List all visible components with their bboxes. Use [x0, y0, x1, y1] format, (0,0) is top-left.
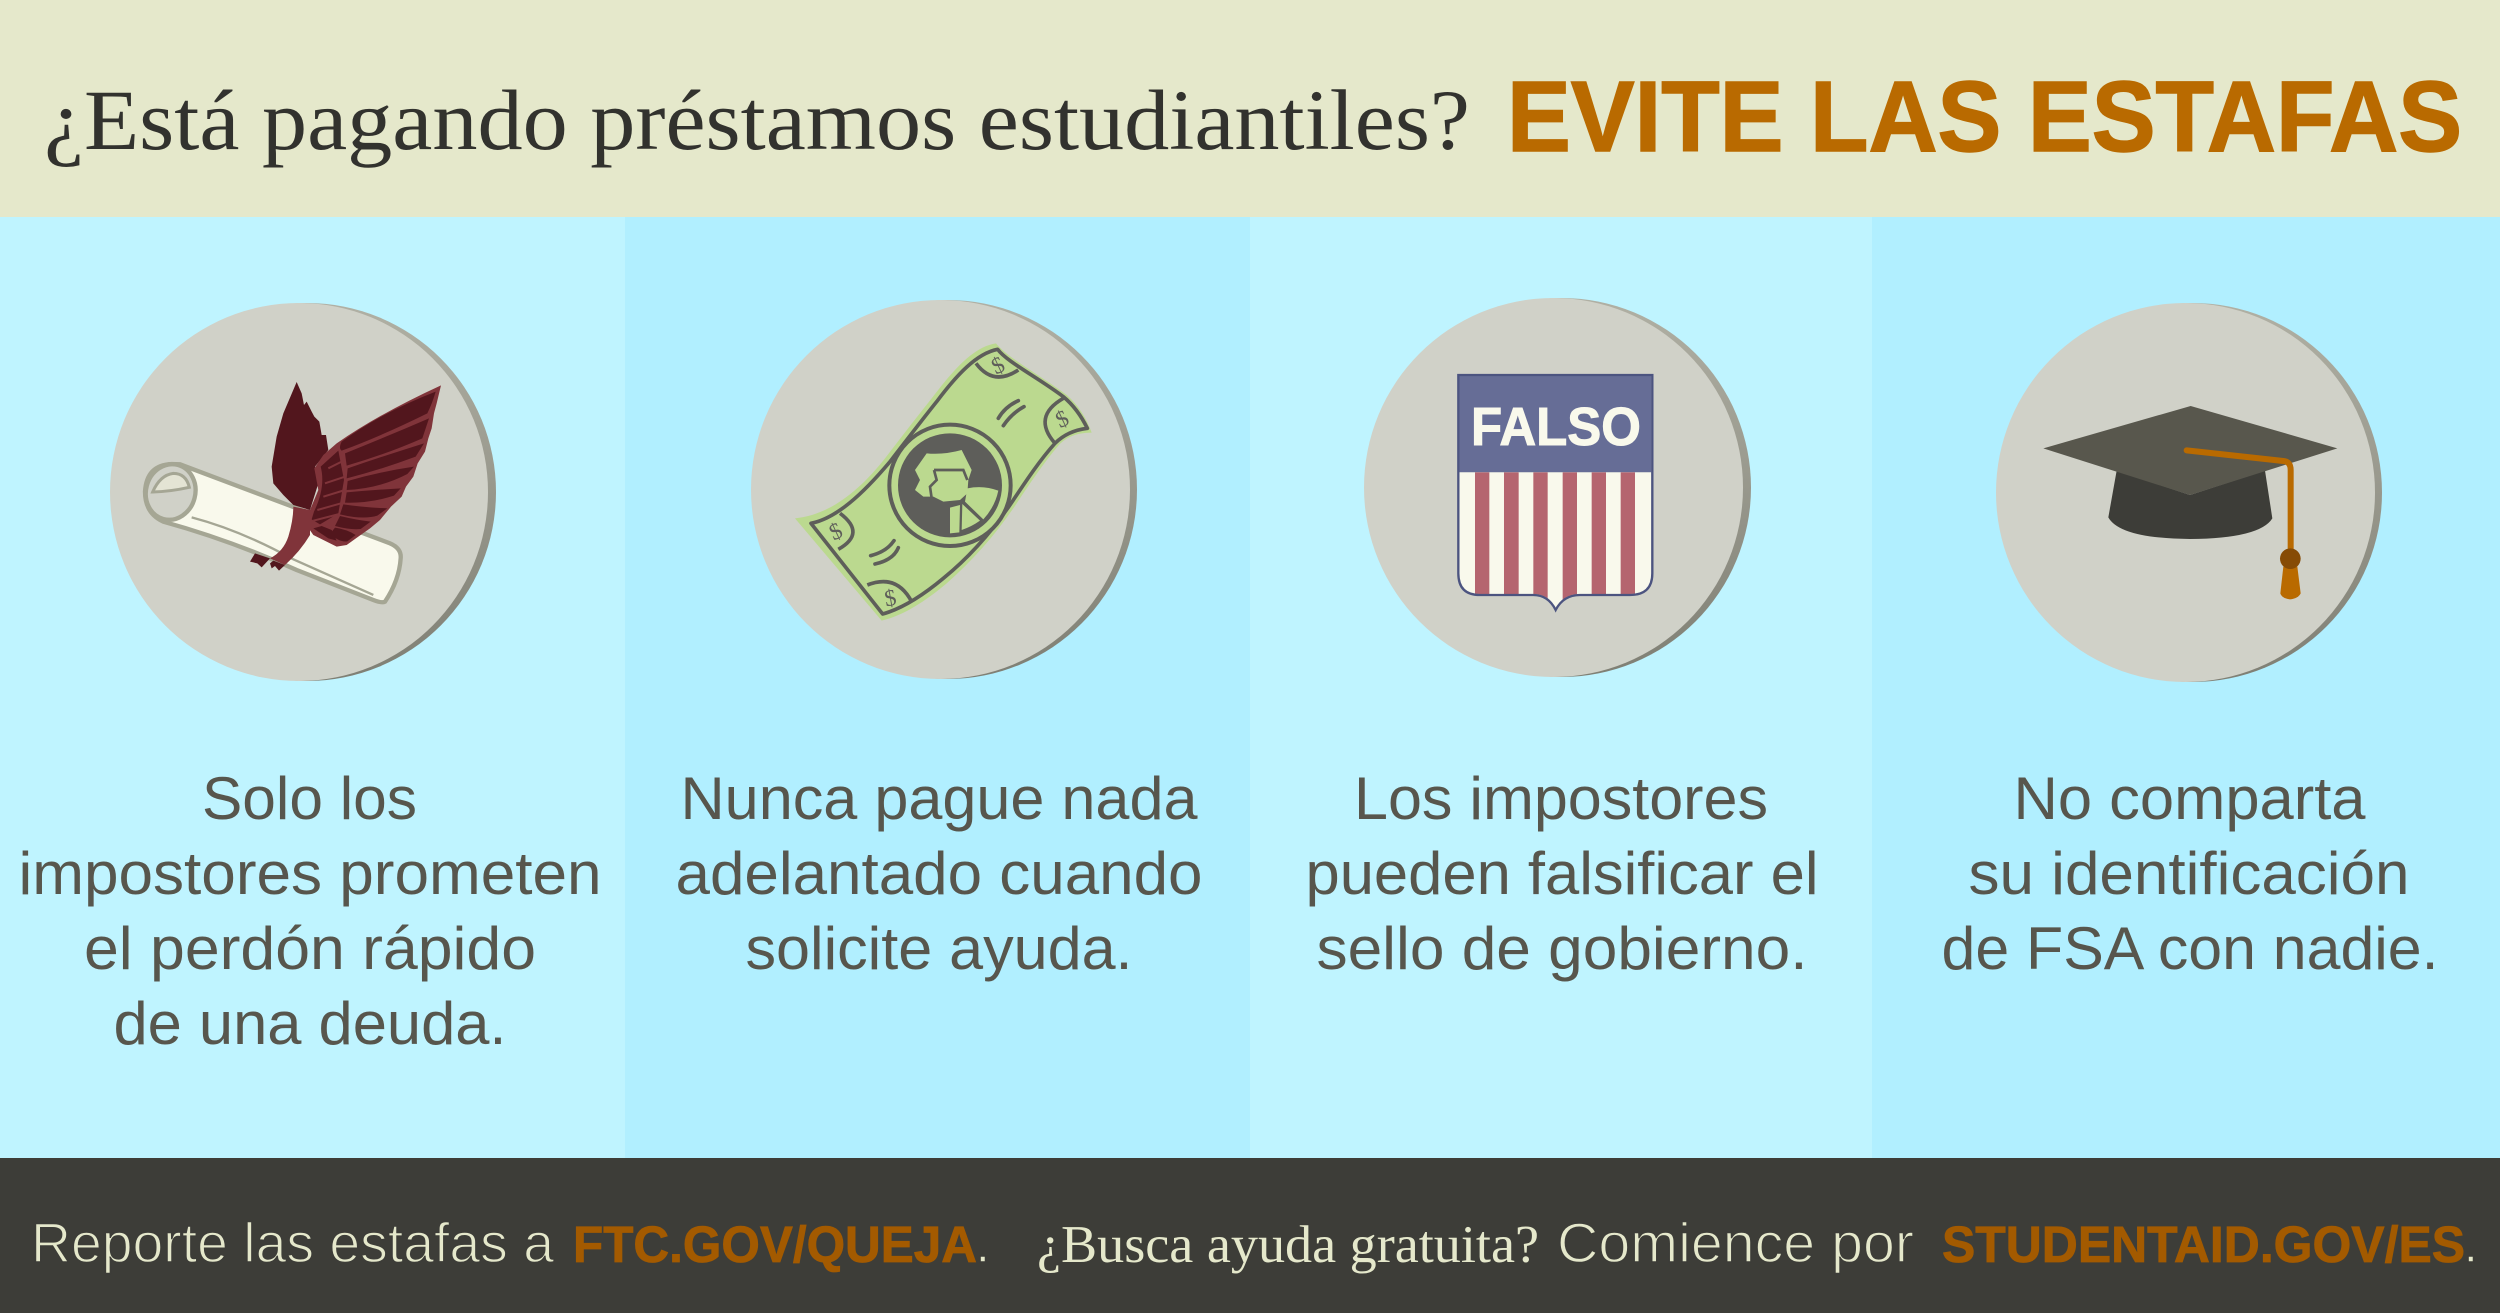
footer period: .	[975, 1211, 991, 1274]
text: fake government seal: Los impostores	[1354, 765, 1768, 832]
title question: ¿Está pagando préstamos estudiantiles?	[44, 72, 1470, 168]
text: instant forgiveness: de una deuda.	[114, 990, 506, 1057]
footer student aid link: STUDENTAID.GOV/ES	[1942, 1216, 2465, 1273]
text: fake government seal: pueden falsificar el	[1306, 840, 1818, 907]
panel: never pay upfront	[625, 217, 1250, 1158]
text: instant forgiveness: Solo los	[202, 765, 417, 832]
text: never pay upfront: solicite ayuda.	[746, 915, 1132, 982]
footer start text: Comience por	[1557, 1211, 1914, 1274]
title callout: EVITE LAS ESTAFAS	[1507, 61, 2462, 173]
footer band	[0, 1158, 2500, 1313]
footer FTC link: FTC.GOV/QUEJA	[573, 1216, 977, 1273]
text: instant forgiveness: el perdón rápido	[84, 915, 536, 982]
text: never share FSA ID	[1942, 765, 2438, 982]
dollar signs	[825, 352, 1073, 612]
dollar signs: $	[1051, 405, 1073, 434]
text: fake government seal: sello de gobierno.	[1316, 915, 1808, 982]
icon: dollar bill	[751, 300, 1137, 679]
text: never share FSA ID: su identificación	[1968, 840, 2410, 907]
dollar signs: $	[825, 518, 847, 546]
panel: never share FSA ID	[1872, 217, 2500, 1158]
text: never pay upfront	[676, 765, 1202, 982]
panel: fake government seal	[1250, 217, 1872, 1158]
text: never share FSA ID: de FSA con nadie.	[1942, 915, 2438, 982]
text: instant forgiveness: impostores prometen	[18, 840, 602, 907]
dollar signs: $	[882, 585, 898, 612]
text: never pay upfront: Nunca pague nada	[680, 765, 1198, 832]
text: instant forgiveness	[18, 765, 602, 1057]
shield word: FALSO	[1471, 398, 1641, 457]
text: never pay upfront: adelantado cuando	[676, 840, 1202, 907]
footer final period: .	[2463, 1211, 2479, 1274]
text: never share FSA ID: No comparta	[2014, 765, 2366, 832]
icon: flying diploma	[110, 303, 496, 681]
icon: graduation cap	[1996, 303, 2382, 682]
header band	[0, 0, 2500, 217]
text: fake government seal	[1306, 765, 1818, 982]
icon: fake shield	[1364, 298, 1751, 677]
dollar signs: $	[987, 352, 1009, 380]
footer report text: Reporte las estafas a	[31, 1211, 555, 1274]
footer free help question: ¿Busca ayuda gratuita?	[1037, 1216, 1539, 1274]
panel: instant forgiveness	[0, 217, 625, 1158]
